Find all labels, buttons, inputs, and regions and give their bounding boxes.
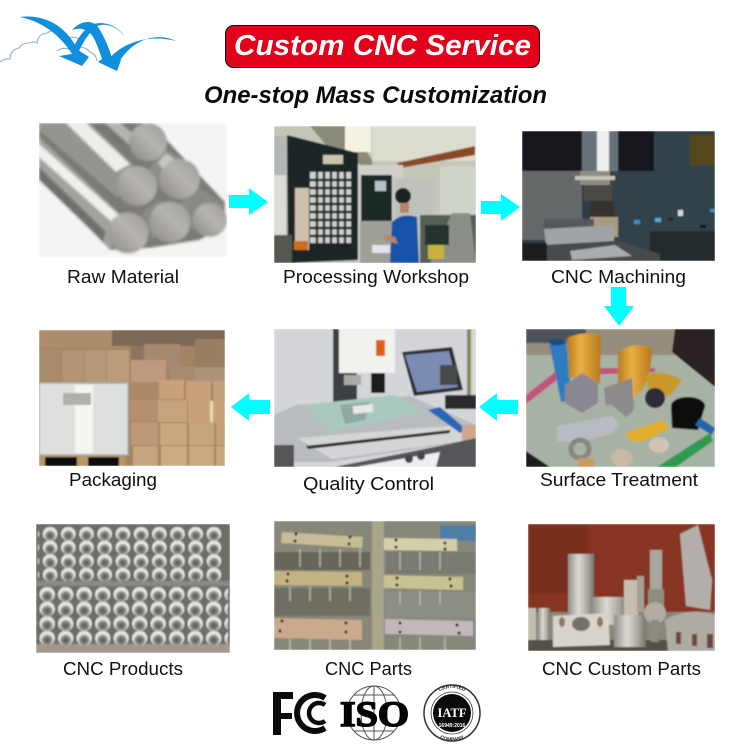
logo: IATF 16949:2016 seal: 16949:2016 (439, 723, 466, 729)
subtitle: One-stop Mass Customization (204, 82, 547, 109)
photo: processing workshop (274, 126, 476, 265)
logo: IATF 16949:2016 seal: CERTIFIED (438, 684, 466, 691)
photo: raw material steel rods (39, 123, 227, 257)
photo: quality control (274, 328, 476, 467)
logo: IATF 16949:2016 seal (423, 684, 481, 742)
arrow: workshop to CNC machining (481, 194, 520, 221)
label: CNC parts: CNC Parts (325, 658, 412, 679)
label: surface treatment: Surface Treatment (540, 469, 698, 490)
label: processing workshop: Processing Workshop (283, 266, 469, 287)
arrow: raw material to workshop (229, 188, 268, 215)
photo: CNC machining (522, 131, 715, 261)
photo: packaging boxes (39, 330, 225, 466)
photo: surface treatment (526, 329, 715, 467)
photo: CNC products tray of steel balls (36, 524, 230, 653)
title banner: Custom CNC Service (234, 30, 531, 62)
logo: cloud and blue birds (0, 17, 176, 71)
label: quality control: Quality Control (303, 473, 434, 494)
logo: ISO globe: ISO (340, 694, 409, 734)
label: CNC products: CNC Products (63, 658, 183, 679)
arrow: quality control to packaging (231, 393, 270, 421)
label: raw material: Raw Material (67, 266, 179, 287)
logo: FC mark (273, 692, 325, 735)
label: CNC custom parts: CNC Custom Parts (542, 658, 701, 679)
photo: CNC custom parts on red-brown wood (528, 524, 715, 651)
title banner (226, 26, 540, 68)
label: packaging: Packaging (69, 469, 157, 490)
logo: IATF 16949:2016 seal: COMPANY (440, 735, 463, 741)
arrow: surface treatment to quality control (479, 393, 518, 421)
logo: ISO globe (340, 686, 409, 740)
label: CNC machining: CNC Machining (551, 266, 686, 287)
arrow: CNC machining down to surface treatment (604, 287, 634, 326)
photo: CNC parts brass bars (274, 521, 476, 650)
logo: IATF 16949:2016 seal: IATF (438, 705, 467, 720)
